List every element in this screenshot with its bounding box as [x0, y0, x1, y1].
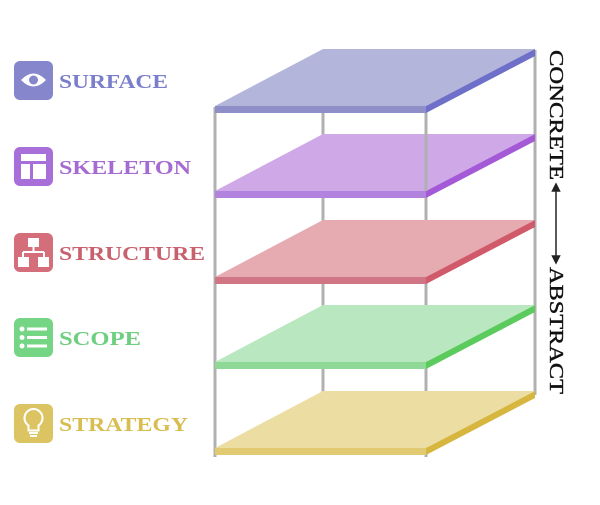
- legend: scope: [14, 318, 141, 357]
- legend: structure: STRUCTURE: [59, 243, 205, 265]
- legend: structure: [14, 233, 205, 272]
- icon: hierarchy: [14, 233, 53, 272]
- icon: eye: [14, 61, 53, 100]
- plane: strategy: [215, 391, 535, 455]
- plane: surface: [215, 49, 535, 113]
- icon: list: [14, 318, 53, 357]
- icon: bulb: [14, 404, 53, 443]
- plane: structure: [215, 220, 535, 284]
- stacked planes diagram: [215, 49, 535, 457]
- legend: surface: SURFACE: [59, 71, 168, 93]
- arrow: concrete to abstract: [552, 184, 560, 263]
- legend: skeleton: SKELETON: [59, 157, 192, 179]
- legend: scope: SCOPE: [59, 328, 141, 350]
- axis label: abstract: ABSTRACT: [545, 267, 567, 394]
- plane: scope: [215, 305, 535, 369]
- legend: surface: [14, 61, 168, 100]
- legend: skeleton: [14, 147, 192, 186]
- icon: layout: [14, 147, 53, 186]
- axis label: concrete: CONCRETE: [545, 50, 567, 180]
- legend: strategy: [14, 404, 189, 443]
- plane: skeleton: [215, 134, 535, 198]
- legend: strategy: STRATEGY: [59, 414, 189, 436]
